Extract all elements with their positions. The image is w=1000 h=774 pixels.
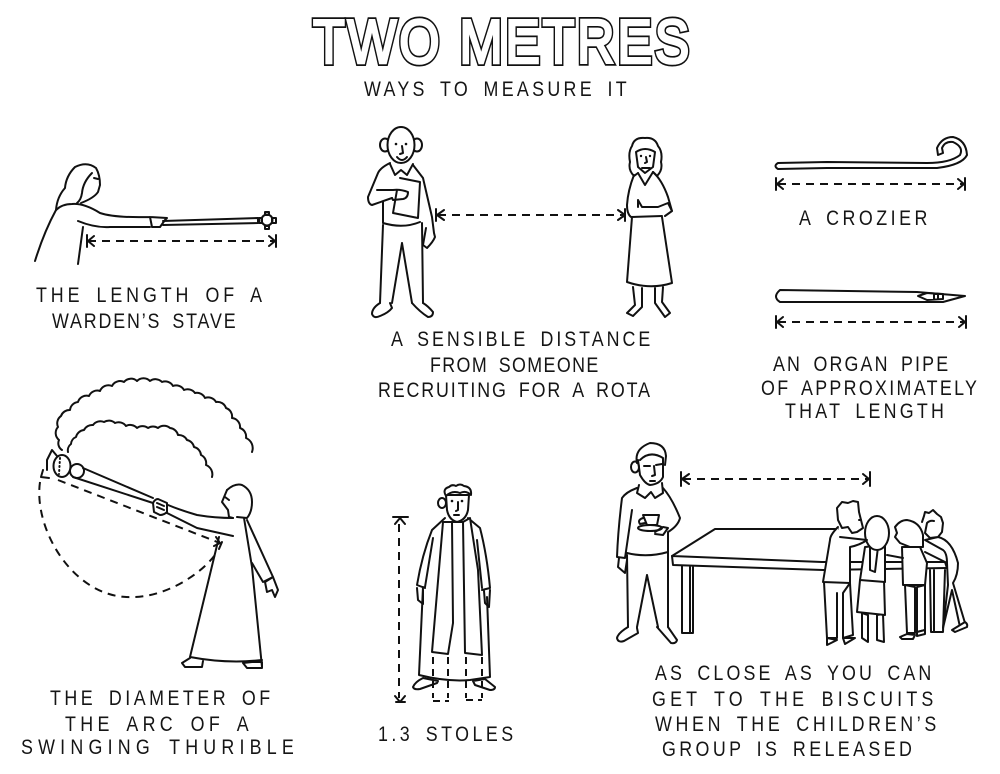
caption: biscuits xyxy=(652,662,936,761)
panel: biscuits xyxy=(617,443,967,761)
caption: organ pipe xyxy=(761,353,977,423)
title: TWO METRES xyxy=(313,8,689,77)
caption: biscuits: GET TO THE BISCUITS xyxy=(652,688,933,711)
caption: stoles: 1.3 STOLES xyxy=(378,723,513,746)
icon: woman with folded arms xyxy=(627,138,672,317)
arrow: priest height xyxy=(393,517,408,702)
icon: children at table xyxy=(823,501,967,645)
panel: crozier xyxy=(776,137,967,230)
caption: biscuits: WHEN THE CHILDREN’S xyxy=(655,713,936,736)
caption: organ pipe: THAT LENGTH xyxy=(785,400,944,423)
caption: crozier: A CROZIER xyxy=(799,207,927,230)
icon: table xyxy=(672,529,947,633)
caption: sensible distance: A SENSIBLE DISTANCE xyxy=(391,328,650,351)
caption: sensible distance xyxy=(378,328,650,402)
arrow: distance xyxy=(436,209,625,221)
arrow: crozier length xyxy=(776,178,965,190)
caption: sensible distance: RECRUITING FOR A ROTA xyxy=(378,379,650,402)
icon: thurible xyxy=(47,450,153,503)
icon: warden figure with stave xyxy=(35,164,276,264)
icon: man with clipboard xyxy=(368,127,435,317)
panel: organ pipe xyxy=(761,290,977,423)
subtitle: WAYS TO MEASURE IT xyxy=(364,78,627,101)
arrow: arc diameter xyxy=(39,470,222,597)
icon: man with tea cup xyxy=(617,443,680,643)
caption: warden's stave: WARDEN’S STAVE xyxy=(52,310,236,333)
caption: thurible: THE DIAMETER OF xyxy=(50,687,270,710)
caption: thurible: SWINGING THURIBLE xyxy=(21,736,294,759)
caption: thurible xyxy=(21,687,294,759)
caption: organ pipe: AN ORGAN PIPE xyxy=(773,353,948,376)
caption: biscuits: GROUP IS RELEASED xyxy=(662,738,912,761)
icon: organ pipe xyxy=(776,290,965,302)
caption: warden's stave: THE LENGTH OF A xyxy=(36,284,262,307)
icon: priest in stole xyxy=(413,484,495,690)
panel: warden's stave xyxy=(35,164,276,333)
panel: stoles xyxy=(378,484,513,746)
panel: swinging thurible xyxy=(21,378,294,759)
caption: biscuits: AS CLOSE AS YOU CAN xyxy=(655,662,931,685)
arrow: distance to biscuits xyxy=(681,472,870,486)
caption: sensible distance: FROM SOMEONE xyxy=(430,354,598,377)
panel: sensible distance xyxy=(368,127,672,402)
arrow: stave length xyxy=(87,235,276,247)
icon: crozier xyxy=(776,137,967,169)
arrow: pipe length xyxy=(776,316,966,328)
icon: dashed stole extension xyxy=(433,657,482,701)
title: TWO METRES xyxy=(313,8,689,77)
caption: warden's stave xyxy=(36,284,262,333)
caption: thurible: THE ARC OF A xyxy=(65,713,249,736)
icon: figure swinging thurible xyxy=(153,485,278,668)
caption: organ pipe: OF APPROXIMATELY xyxy=(761,377,977,400)
icon: smoke plume xyxy=(56,378,253,477)
